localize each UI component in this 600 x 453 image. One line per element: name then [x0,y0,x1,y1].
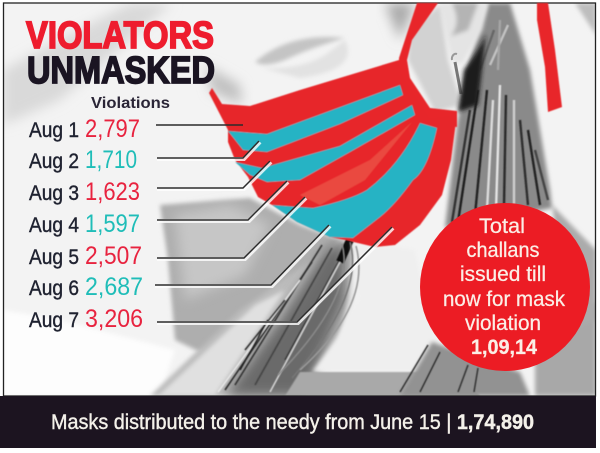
Aug 3 row: Aug 3 [29,182,79,205]
lower hair streaks [218,240,350,392]
Aug 2 row: Aug 2 [29,150,79,173]
mask cyan stripes [228,85,437,238]
callout: total challans: issued till [460,263,546,286]
column heading: violations: Violations [91,95,170,112]
Aug 7 row: Aug 7 [29,309,79,332]
Aug 5 row: Aug 5 [29,246,79,269]
Aug 1 row: Aug 1 [29,119,79,142]
title: VIOLATORS [26,15,214,57]
upper hair [445,3,552,228]
illustration: face mask [209,3,562,247]
violations list by date [29,115,143,333]
callout: total challans: now for mask [443,288,565,311]
title [26,15,215,92]
callout: total challans: challans [466,239,540,262]
Aug 5 row [29,242,142,270]
Aug 2 row [29,146,137,174]
footer band [0,396,596,448]
leader lines to mask pleats [155,125,393,323]
Aug 7 row: 3,206 [85,305,143,333]
Aug 4 row: Aug 4 [29,214,79,237]
ear [440,3,488,64]
Aug 2 row: 1,710 [85,146,137,174]
Aug 6 row: Aug 6 [29,277,79,300]
Aug 7 row [29,305,143,333]
Aug 4 row [29,210,140,238]
Aug 6 row [29,273,143,301]
title: UNMASKED [27,50,215,92]
footer text: Masks distributed to the needy from June 15 | 1,74,890 [51,411,534,434]
Aug 3 row: 1,623 [85,178,140,206]
Aug 5 row: 2,507 [85,242,142,270]
Aug 3 row [29,178,140,206]
mask straps [399,3,562,127]
Aug 4 row: 1,597 [85,210,140,238]
Aug 6 row: 2,687 [85,273,143,301]
callout: total challans [420,203,590,371]
mask red body [209,60,457,247]
callout: total challans: Total [479,215,525,238]
callout: total challans: violation [465,312,541,335]
callout: total challans: 1,09,14 [471,336,537,359]
Aug 1 row [29,115,140,143]
Aug 1 row: 2,797 [85,115,140,143]
